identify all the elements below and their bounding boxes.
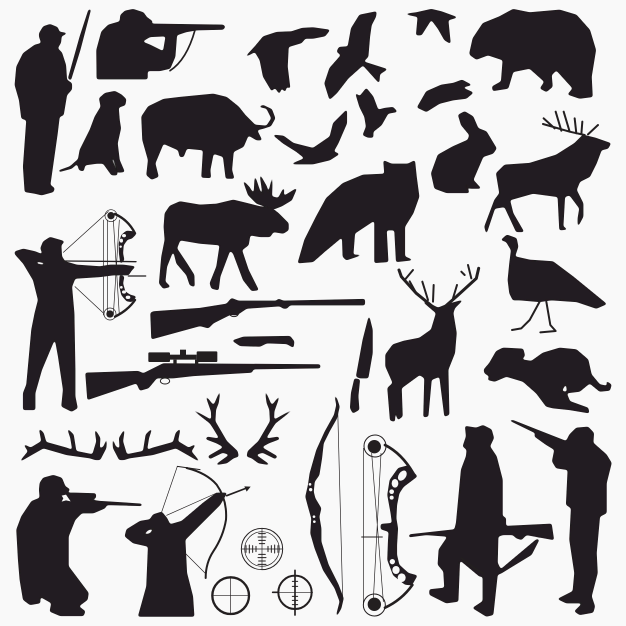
archer with compound bow xyxy=(15,212,146,411)
kite bird xyxy=(325,12,387,99)
flying eagle xyxy=(246,28,330,93)
small duck xyxy=(356,88,397,137)
hunter holding rifle at hip xyxy=(409,425,554,616)
plain reticle xyxy=(212,577,249,614)
hunting knife xyxy=(233,336,294,347)
fixed blade knife xyxy=(350,316,372,413)
stag xyxy=(386,265,479,421)
buffalo xyxy=(142,94,275,179)
running dog xyxy=(484,348,611,413)
turkey xyxy=(501,235,606,332)
elk xyxy=(485,112,611,233)
soaring eagle xyxy=(273,110,347,164)
archer with recurve bow xyxy=(125,466,251,616)
antler, upright left xyxy=(193,391,238,465)
recurve bow xyxy=(306,391,343,616)
reticle with ticks xyxy=(241,528,283,570)
antler, horizontal left xyxy=(20,429,107,461)
rifle, upper xyxy=(151,298,365,339)
moose xyxy=(159,175,297,291)
compound bow xyxy=(362,435,417,616)
diving duck xyxy=(417,80,473,112)
bear xyxy=(470,9,596,98)
reticle with crosshair bars xyxy=(273,570,313,615)
antler, horizontal right xyxy=(113,429,199,461)
hunter aiming shotgun upward xyxy=(510,420,611,615)
rabbit xyxy=(431,112,496,193)
antler, upright right xyxy=(247,391,293,465)
hunter aiming rifle, bust xyxy=(97,9,225,79)
fox xyxy=(298,161,419,263)
hunter standing with rifle xyxy=(15,9,91,195)
kneeling shooter with scope xyxy=(17,475,142,616)
compound bow on archer xyxy=(104,210,136,320)
flying goose xyxy=(406,9,457,43)
sitting dog xyxy=(59,91,126,175)
scoped rifle xyxy=(86,350,320,400)
